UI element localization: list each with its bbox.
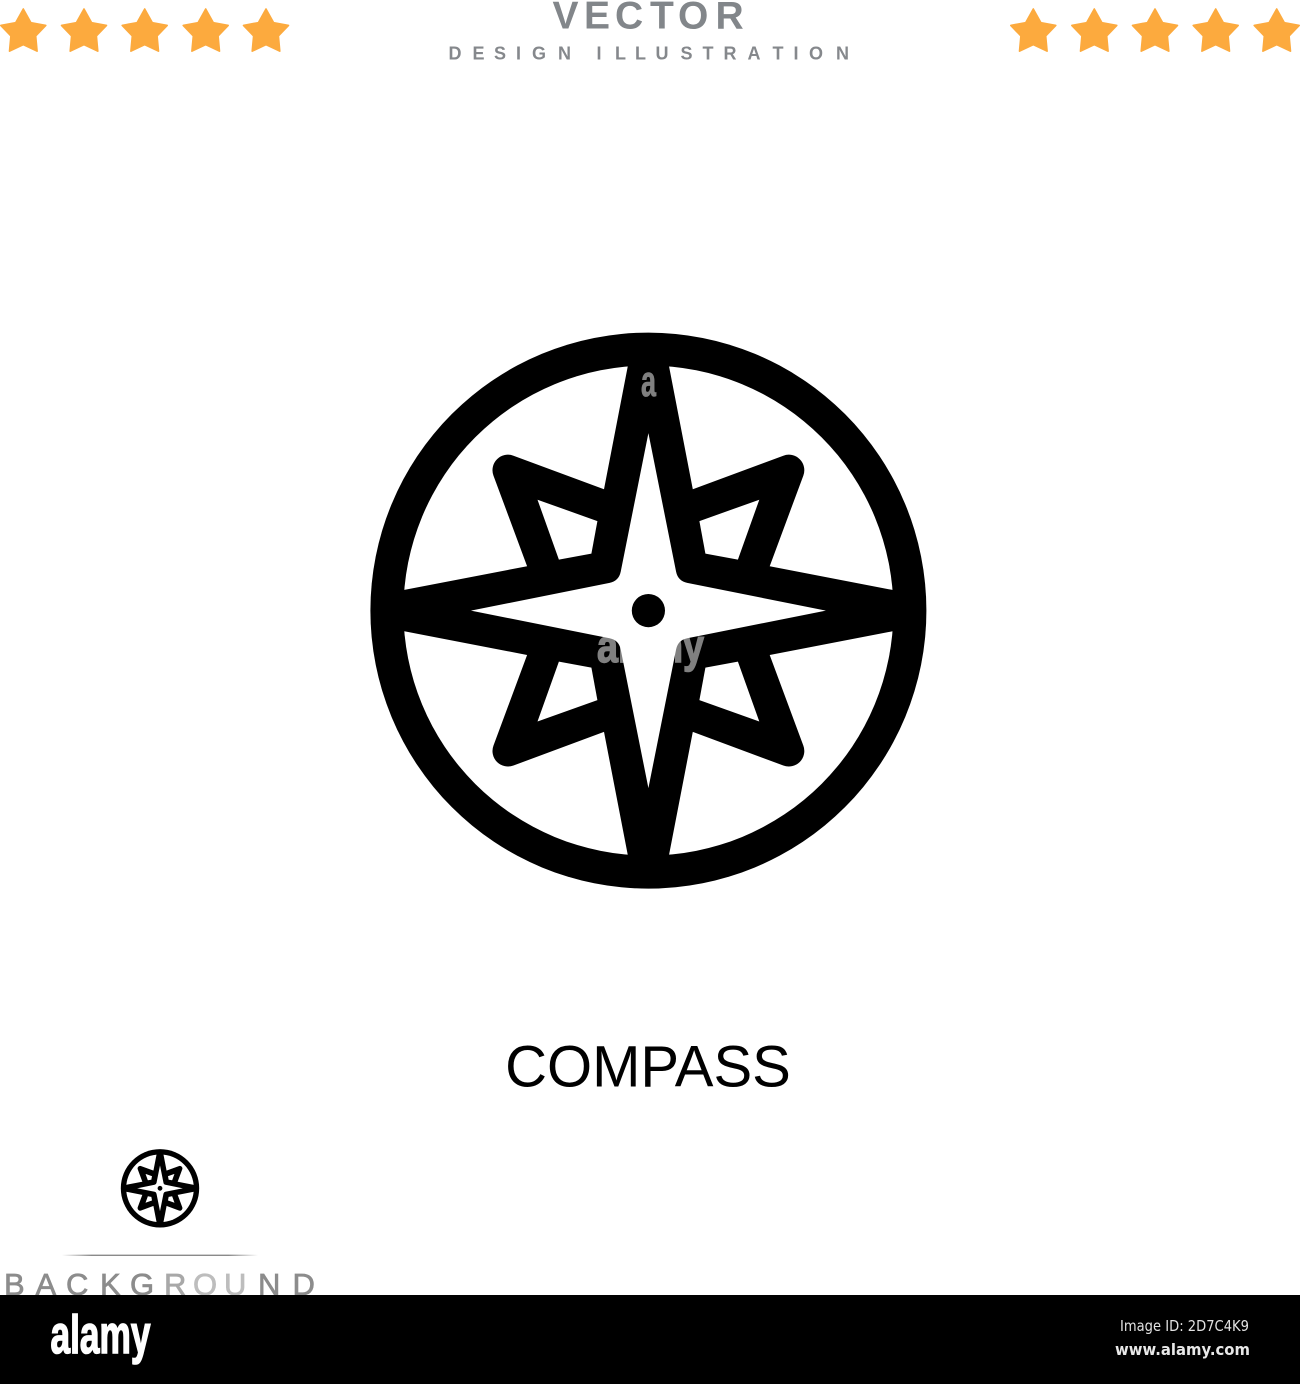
caption: background: U [224, 1267, 246, 1302]
footer bar [0, 1295, 1300, 1384]
compass rose outline [402, 365, 894, 857]
subheading: design illustration: DESIGN ILLUSTRATION [448, 44, 849, 64]
icon: large compass [370, 333, 926, 889]
footer logo: alamy: alamy [50, 1305, 150, 1365]
caption: background: A [36, 1267, 56, 1302]
caption: background: R [164, 1267, 186, 1302]
compass inner white star [471, 433, 826, 788]
icon title: compass: COMPASS [505, 1035, 791, 1100]
caption: background: B [4, 1267, 25, 1302]
caption: background: O [193, 1267, 217, 1302]
footer website: www.alamy.com [1115, 1340, 1250, 1359]
caption: background: D [292, 1267, 315, 1302]
icon: small compass [121, 1149, 199, 1227]
watermark: small letter: a [641, 357, 656, 406]
watermark: alamy: alamy [597, 620, 704, 672]
compass diagonal point cut-outs [538, 500, 759, 722]
star rating: left [1, 9, 289, 51]
footer image id: Image ID: 2D7C4K9 [1120, 1317, 1249, 1335]
star rating: right [1011, 9, 1299, 51]
caption: background: C [66, 1267, 88, 1302]
caption: background: K [100, 1267, 121, 1302]
compass centre dot [632, 594, 665, 627]
caption: background: N [258, 1267, 280, 1302]
caption: background: G [130, 1267, 154, 1302]
